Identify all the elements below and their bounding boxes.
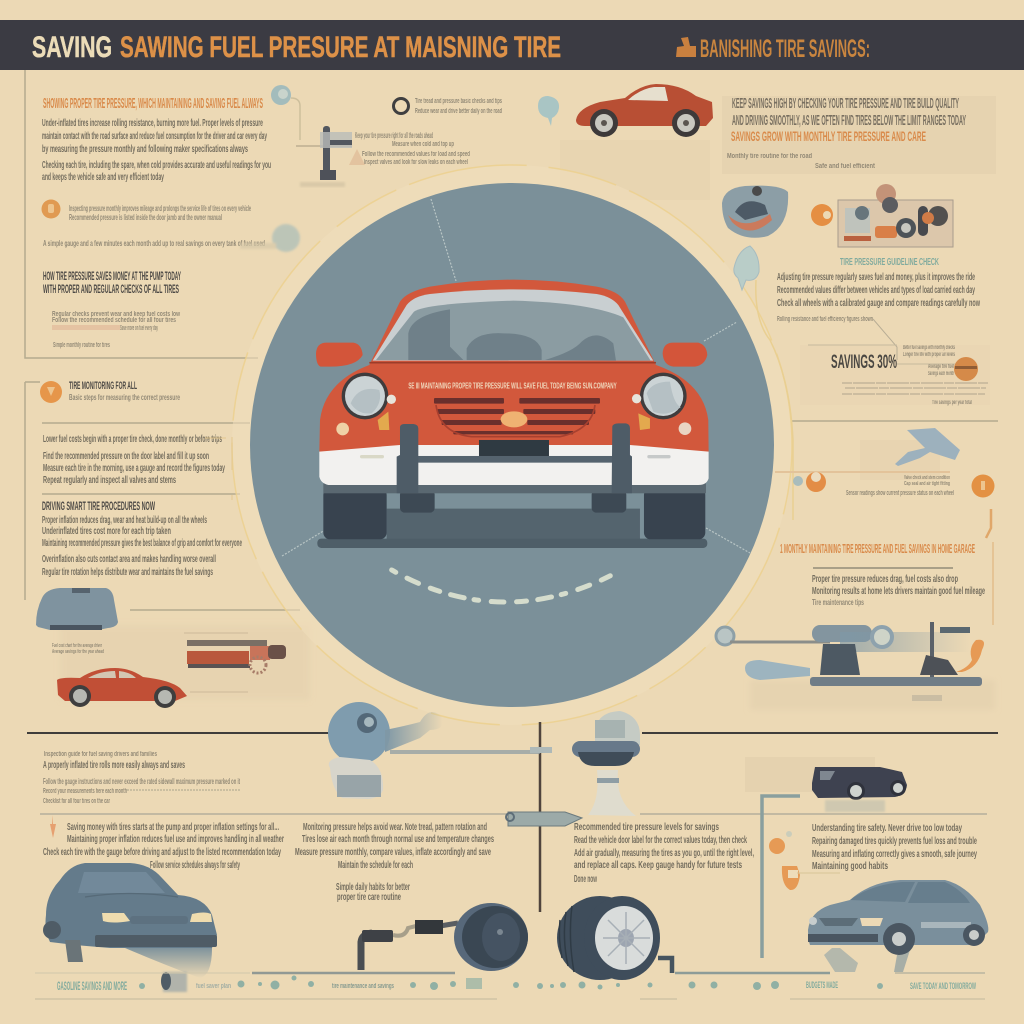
left middle paragraph: Repeat regularly and inspect all valves and stems xyxy=(43,475,176,486)
bottom legend strip xyxy=(57,976,976,993)
left lower paragraph: Underinflated tires cost more for each trip taken xyxy=(42,526,171,537)
bottom paragraph three: and replace all caps. Keep gauge handy for future tests xyxy=(574,860,742,871)
top-left text block: Under-inflated tires increase rolling resistance, burning more fuel. Proper levels of pressure xyxy=(42,118,263,129)
tire ring note: Measure when cold and top up xyxy=(392,141,454,148)
numbered note one: A simple gauge and a few minutes each month add up to real savings on every tank of fuel used xyxy=(43,239,265,248)
bottom legend strip: BUDGETS MADE xyxy=(806,980,838,990)
left lower paragraph: Overinflation also cuts contact area and makes handling worse overall xyxy=(42,554,216,565)
car body xyxy=(319,280,709,452)
bottom paragraph two: Monitoring pressure helps avoid wear. Note tread, pattern rotation and xyxy=(303,822,487,833)
bumper lights xyxy=(360,455,384,458)
pressure gauge callout: Average tire fuel xyxy=(928,364,954,370)
body xyxy=(808,880,988,945)
central circle xyxy=(232,165,792,725)
wheel xyxy=(43,921,61,939)
faded blue balloon left xyxy=(240,224,300,252)
sensor strip xyxy=(775,472,994,498)
left lower paragraph: DRIVING SMART TIRE PROCEDURES NOW xyxy=(42,499,155,513)
bottom paragraph three xyxy=(574,822,754,885)
front wheels xyxy=(323,488,387,539)
red block illustration xyxy=(184,633,286,692)
orange arrow xyxy=(50,815,56,838)
grey car bottom left xyxy=(43,863,217,992)
dashed ring xyxy=(232,165,792,725)
licence plate xyxy=(479,440,549,457)
bottom left text: Record your measurements here each month xyxy=(43,788,127,795)
headlights xyxy=(342,373,388,419)
left lower paragraph: Proper inflation reduces drag, wear and heat build-up on all the wheels xyxy=(42,515,207,526)
road dash arc xyxy=(392,570,618,602)
orange badge xyxy=(811,204,833,226)
hose xyxy=(393,926,416,936)
left middle paragraph: Find the recommended pressure on the door label and fill it up soon xyxy=(43,451,209,462)
bottom paragraph two: proper tire care routine xyxy=(337,892,401,903)
dotted guide lines xyxy=(282,199,750,556)
top-left text block xyxy=(42,95,271,183)
text: SHOWING PROPER TIRE PRESSURE, WHICH MAINTAINING AND SAVING FUEL ALWAYS xyxy=(43,95,263,112)
bold callout: Save more on fuel every day xyxy=(120,325,158,332)
faded small text: Average savings for the year ahead xyxy=(52,649,104,655)
bottom paragraph one xyxy=(43,822,284,871)
pressure gauge callout: Longer tire life with proper air levels xyxy=(903,352,955,358)
top-right heading block: Safe and fuel efficient xyxy=(815,163,876,170)
dark car right xyxy=(812,767,907,812)
balloon and connector right xyxy=(734,246,793,520)
bottom paragraph two: Tires lose air each month through normal use and temperature changes xyxy=(302,834,494,845)
numbered note one: Inspecting pressure monthly improves mileage and prolongs the service life of tires on every vehicle xyxy=(69,204,251,213)
orange badge xyxy=(42,200,60,218)
bottom legend strip: fuel saver plan xyxy=(196,983,231,990)
clamp on vertical line xyxy=(506,747,582,826)
bold callout xyxy=(43,269,181,349)
body xyxy=(46,863,217,948)
top-right heading block xyxy=(727,95,966,170)
red side car left xyxy=(57,668,187,708)
windshield xyxy=(78,872,165,893)
sensor strip: Cap seal and air tight fitting xyxy=(904,481,950,487)
left middle paragraph: Lower fuel costs begin with a proper tire check, done monthly or before trips xyxy=(43,434,222,445)
bold callout: Follow the recommended schedule for all four tires xyxy=(52,317,176,324)
bottom paragraph three: Recommended tire pressure levels for savings xyxy=(574,822,719,833)
grey car bottom right xyxy=(808,880,988,972)
blue device xyxy=(36,588,118,630)
grille xyxy=(434,398,600,434)
left middle paragraph: Measure each tire in the morning, use a gauge and record the figures today xyxy=(43,463,225,474)
top-left text block: by measuring the pressure monthly and following maker specifications always xyxy=(42,144,248,155)
orange bracket xyxy=(986,509,993,625)
white bumper xyxy=(319,445,709,485)
right orange heading and text xyxy=(780,541,985,607)
bottom left text: Follow the gauge instructions and never exceed the rated sidewall maximum pressure marked on it xyxy=(43,777,240,786)
turn signals xyxy=(378,412,389,430)
bottom paragraph one: Follow service schedules always for safety xyxy=(150,860,240,871)
engine illustrations top right xyxy=(722,184,953,247)
windows xyxy=(850,882,970,903)
tire jack post xyxy=(323,126,330,176)
bottom left text xyxy=(43,751,240,805)
title: SAVING xyxy=(32,31,112,64)
lens icon bottom centre xyxy=(328,702,540,799)
windshield xyxy=(373,289,653,361)
headlamp and grille xyxy=(860,918,883,926)
title: SAWING FUEL PRESURE AT MAISNING TIRE xyxy=(120,31,561,64)
dome gauge xyxy=(572,711,640,816)
mirrors xyxy=(316,343,363,367)
teal connector xyxy=(762,796,800,958)
bottom paragraph four xyxy=(812,823,977,872)
numbered note one: Recommended pressure is listed inside the door jamb and the owner manual xyxy=(69,213,222,222)
tire ring note: Follow the recommended values for load and speed xyxy=(362,151,470,158)
orange marks right xyxy=(769,831,840,890)
tire xyxy=(454,903,528,971)
tire ring note: Keep your tire pressure right for all the roads ahead xyxy=(355,131,433,140)
wheels xyxy=(883,923,915,955)
bottom paragraph two: Maintain the schedule for each xyxy=(338,860,413,871)
bottom left text: Checklist for all four tires on the car xyxy=(43,798,110,805)
divider lines xyxy=(27,722,998,912)
text: HOW TIRE PRESSURE SAVES MONEY AT THE PUMP TODAY xyxy=(43,269,181,283)
fade cone xyxy=(125,948,212,978)
top-right heading block: Monthly tire routine for the road xyxy=(727,153,812,160)
left note two: Basic steps for measuring the correct pressure xyxy=(69,393,180,402)
right text block: Rolling resistance and fuel efficiency figures shown xyxy=(777,316,873,323)
hood crease xyxy=(85,894,178,897)
rear wheels xyxy=(400,490,435,513)
orange badge xyxy=(40,381,62,403)
pressure gauge callout: SAVINGS 30% xyxy=(831,352,897,373)
ring icon xyxy=(394,98,408,114)
right orange heading and text: Tire maintenance tips xyxy=(812,598,864,607)
jack legs xyxy=(824,948,858,972)
left lower paragraph: Regular tire rotation helps distribute wear and maintains the fuel savings xyxy=(42,567,213,578)
faded small text: Fuel cost chart for the average driver xyxy=(52,643,102,649)
title xyxy=(32,31,561,64)
top-left text block: and keeps the vehicle safe and very efficient today xyxy=(42,172,164,183)
bottom paragraph three: Read the vehicle door label for the correct values today, then check xyxy=(574,835,747,846)
bottom legend strip: GASOLINE SAVINGS AND MORE xyxy=(57,979,127,993)
left lower paragraph xyxy=(42,499,242,578)
right text block xyxy=(777,257,980,323)
left middle paragraph xyxy=(43,434,232,500)
text: Checking each tire, including the spare, when cold provides accurate and useful readings for you xyxy=(42,160,271,171)
tire ring note: Inspect valves and look for slow leaks on each wheel xyxy=(364,159,468,166)
ground line xyxy=(35,973,985,999)
header badge xyxy=(676,35,870,63)
left note two xyxy=(40,380,180,403)
main tire xyxy=(557,896,672,980)
badge xyxy=(501,411,527,427)
tire ring note xyxy=(355,98,502,166)
valve hose and left tire xyxy=(361,903,528,971)
pressure gauge callout: Savings each month xyxy=(928,371,954,377)
bottom paragraph two: Simple daily habits for better xyxy=(336,882,410,893)
side car top xyxy=(576,84,713,137)
bottom paragraph four: Maintaining good habits xyxy=(812,861,888,872)
headlights xyxy=(102,912,212,922)
hood text: SE III MAINTAINING PROPER TIRE PRESSURE WILL SAVE FUEL TODAY BEING SUN.COMPANY xyxy=(408,381,617,390)
bottom paragraph one: Check each tire with the gauge before driving and adjust to the listed recommendation today xyxy=(43,847,281,858)
bottom paragraph three: Add air gradually, measuring the tires as you go, until the right level, xyxy=(574,848,754,859)
orange gauge xyxy=(954,357,978,381)
bottom paragraph two xyxy=(295,822,494,903)
front bumper xyxy=(95,935,217,947)
left note two: TIRE MONITORING FOR ALL xyxy=(69,380,137,392)
bottom paragraph two: Measure pressure monthly, compare values, inflate accordingly and save xyxy=(295,847,491,858)
jack xyxy=(65,940,83,962)
tire ring note: Tire tread and pressure basic checks and tips xyxy=(415,98,502,105)
machine diagram xyxy=(838,200,953,247)
text: Maintaining recommended pressure gives the best balance of grip and comfort for everyone xyxy=(42,538,242,549)
gauge icon top-left xyxy=(271,85,365,187)
round badge illustration xyxy=(722,186,788,238)
bottom paragraph three: Done now xyxy=(574,874,597,885)
text: maintain contact with the road surface and reduce fuel consumption for the driver and car every day xyxy=(42,131,267,142)
bold callout: Regular checks prevent wear and keep fuel costs low xyxy=(52,311,180,318)
bottom left text: Inspection guide for fuel saving drivers and families xyxy=(44,751,157,758)
bottom left text: A properly inflated tire rolls more easily always and saves xyxy=(43,760,185,771)
bottom paragraph one: Saving money with tires starts at the pump and proper inflation settings for all... xyxy=(67,822,279,833)
sensor strip: Valve check and stem condition xyxy=(904,475,950,481)
bottom legend strip: tire maintenance and savings xyxy=(332,983,394,990)
main car front view xyxy=(316,280,709,602)
tire ring note: Reduce wear and drive better daily on the road xyxy=(415,108,502,115)
compressor illustration xyxy=(716,622,995,710)
text: WITH PROPER AND REGULAR CHECKS OF ALL TIRES xyxy=(43,282,179,296)
pressure gauge callout: Tire savings per year total xyxy=(932,400,972,406)
pressure gauge callout: Better fuel savings with monthly checks xyxy=(903,345,955,351)
wedge icon xyxy=(895,428,960,466)
header bar xyxy=(0,20,1024,70)
balloon top centre xyxy=(538,96,559,126)
road shadow xyxy=(387,509,640,540)
faded small text xyxy=(52,643,104,655)
soft panels xyxy=(60,96,996,792)
header badge: BANISHING TIRE SAVINGS: xyxy=(700,35,870,63)
orange badge xyxy=(972,474,994,498)
numbered note one xyxy=(42,200,265,248)
bold callout: Simple monthly routine for tires xyxy=(53,342,110,349)
frame lines xyxy=(25,70,998,610)
bumper bar xyxy=(398,456,632,463)
under tray xyxy=(323,483,706,493)
bottom paragraph one: Maintaining proper inflation reduces fuel use and improves handling in all weather xyxy=(67,834,284,845)
tow posts xyxy=(397,424,418,493)
pressure gauge callout xyxy=(808,319,988,406)
seats xyxy=(408,309,616,361)
right text block: TIRE PRESSURE GUIDELINE CHECK xyxy=(840,257,939,268)
